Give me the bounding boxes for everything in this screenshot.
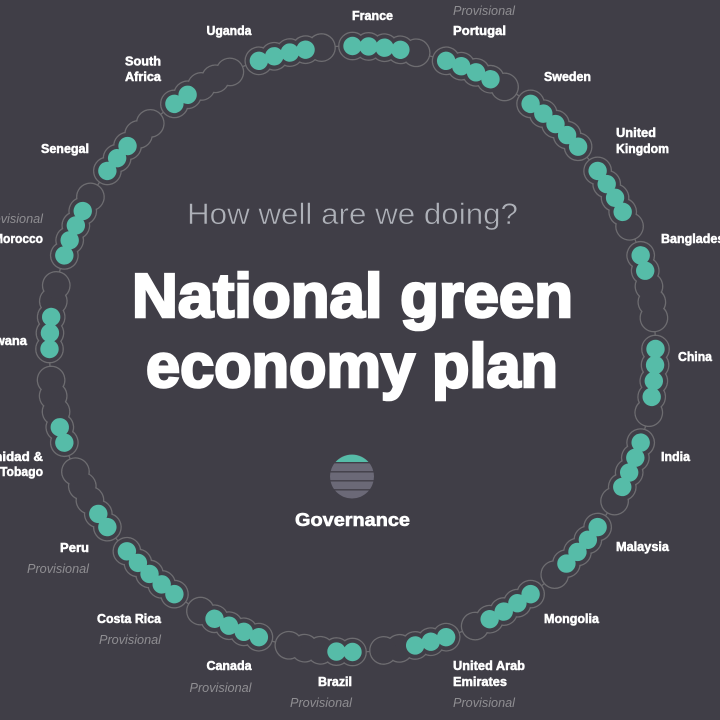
country: Peru, 2 of 5, provisional (27, 448, 134, 576)
country: Sweden, 5 of 5: Sweden (544, 70, 591, 84)
country: Trinidad and Tobago, 2 of 5: Tobago (0, 465, 43, 479)
country: China, 4 of 5 (632, 335, 713, 430)
country: China, 4 of 5: China (678, 350, 713, 364)
country: Morocco, 4 of 5, provisional (0, 174, 111, 276)
title (132, 262, 573, 401)
icon: governance score circle, 1 of 5 bands filled (328, 454, 376, 498)
country: United Kingdom, 4 of 5 (571, 126, 669, 250)
title: National green (132, 262, 573, 331)
country: Portugal, 4 of 5, provisional: Provisional (453, 3, 516, 18)
country: Portugal, 4 of 5, provisional (426, 3, 528, 108)
country: Malaysia, 4 of 5: Malaysia (616, 540, 670, 554)
country: United Arab Emirates, 3 of 5, provisional: United Arab (453, 659, 525, 673)
country: Canada, 4 of 5, provisional: Provisional (190, 680, 253, 695)
country: France, 4 of 5 (339, 9, 434, 69)
country: India, 4 of 5 (594, 422, 691, 524)
country: United Kingdom, 4 of 5: Kingdom (616, 142, 669, 156)
country: Trinidad and Tobago, 2 of 5 (0, 358, 90, 479)
country: Canada, 4 of 5, provisional: Canada (206, 659, 253, 673)
title: economy plan (146, 332, 558, 401)
country: Mongolia, 4 of 5: Mongolia (544, 612, 600, 626)
country: India, 4 of 5: India (661, 450, 691, 464)
country: Malaysia, 4 of 5 (531, 502, 670, 601)
country: Brazil, 2 of 5, provisional: Brazil (318, 675, 352, 689)
country: Peru, 2 of 5, provisional: Peru (60, 541, 89, 555)
country: Costa Rica, 5 of 5, provisional: Provisional (99, 632, 162, 647)
country: United Arab Emirates, 3 of 5, provisional: Provisional (453, 695, 516, 710)
country: Costa Rica, 5 of 5, provisional: Costa Rica (97, 612, 162, 626)
country: Senegal, 3 of 5: Senegal (41, 142, 89, 156)
country: Canada, 4 of 5, provisional (177, 590, 279, 695)
country: United Arab Emirates, 3 of 5, provisional (362, 611, 525, 710)
heading: Governance: Governance (295, 510, 410, 530)
country: Peru, 2 of 5, provisional: Provisional (27, 561, 90, 576)
country: Costa Rica, 5 of 5, provisional (97, 528, 199, 647)
subtitle: How well are we doing? (187, 198, 518, 231)
country: Senegal, 3 of 5 (41, 97, 174, 196)
country: Uganda, 4 of 5: Uganda (206, 24, 253, 38)
country: Bangladesh, 2 of 5 (615, 232, 720, 340)
country: Sweden, 5 of 5 (506, 70, 604, 170)
country: United Kingdom, 4 of 5: United (616, 126, 656, 140)
country: South Africa, 2 of 5: Africa (125, 70, 162, 84)
country: United Arab Emirates, 3 of 5, provisional: Emirates (453, 675, 507, 689)
country: South Africa, 2 of 5 (125, 45, 254, 131)
country: Brazil, 2 of 5, provisional: Provisional (290, 695, 353, 710)
country: France, 4 of 5: France (352, 9, 393, 23)
country: Brazil, 2 of 5, provisional (271, 629, 366, 710)
country: Portugal, 4 of 5, provisional: Portugal (453, 24, 506, 38)
country: South Africa, 2 of 5: South (125, 54, 161, 68)
country: Botswana, 3 of 5 (0, 268, 73, 363)
country: Mongolia, 4 of 5 (451, 567, 600, 653)
country: Uganda, 4 of 5 (206, 22, 343, 87)
